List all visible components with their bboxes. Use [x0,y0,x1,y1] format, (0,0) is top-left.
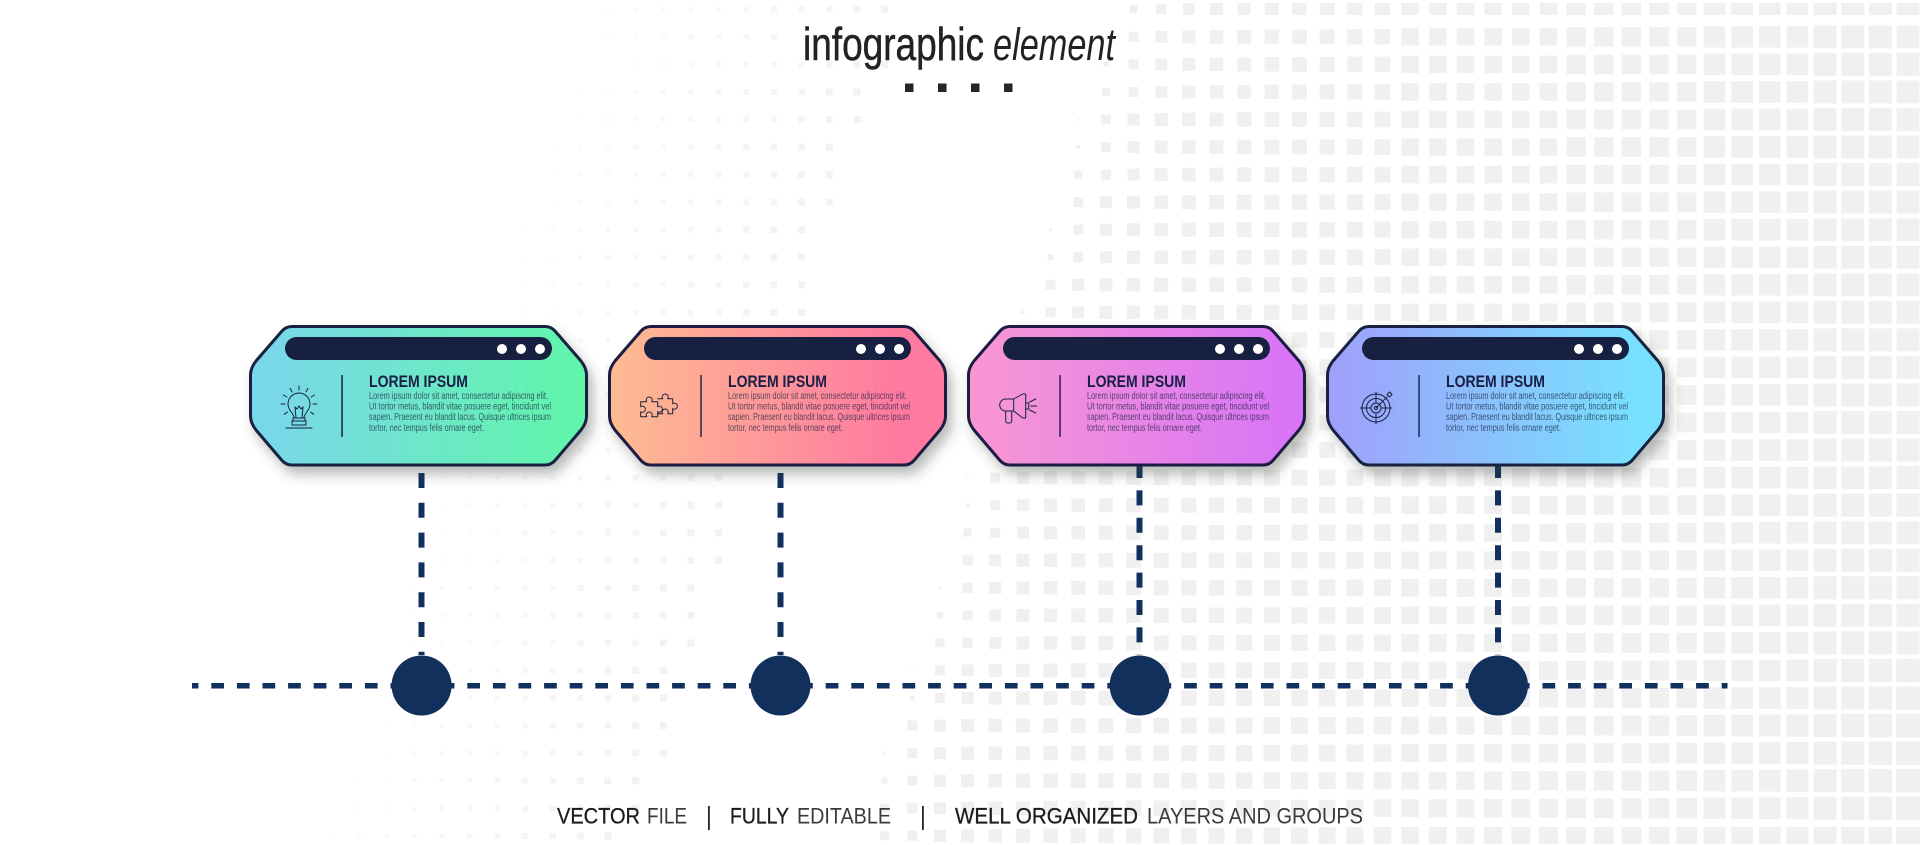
timeline node 1 [392,656,452,716]
icon: puzzle [641,394,677,417]
connector 1 [418,473,424,655]
footer features text: EDITABLE [797,804,891,828]
timeline node 2 [750,656,810,716]
connector 3 [1136,463,1142,655]
body text: sapien. Praesent eu blandit lacus. Quisque ultrices ipsum [369,412,551,423]
body text: tortor, nec tempus felis ornare eget. [369,423,484,434]
body text: tortor, nec tempus felis ornare eget. [728,423,843,434]
panel: card 2: LOREM IPSUM [728,373,827,391]
body text: Ut tortor metus, blandit vitae posuere eget, tincidunt vel [728,402,910,412]
panel: card 3: LOREM IPSUM [1087,373,1186,391]
panel: card 3 [968,326,1304,465]
panel: card 4: LOREM IPSUM [1446,373,1545,391]
body text: Lorem ipsum dolor sit amet, consectetur adipiscing elit. [1087,391,1266,402]
horizontal dashed timeline [192,683,1728,689]
body text: sapien. Praesent eu blandit lacus. Quisque ultrices ipsum [728,412,910,423]
body text: Ut tortor metus, blandit vitae posuere eget, tincidunt vel [369,402,551,412]
timeline node 4 [1468,656,1528,716]
title dots [905,84,1012,92]
body text: sapien. Praesent eu blandit lacus. Quisque ultrices ipsum [1087,412,1269,423]
body text: Lorem ipsum dolor sit amet, consectetur adipiscing elit. [1446,391,1625,402]
body text: tortor, nec tempus felis ornare eget. [1087,423,1202,434]
body text [1087,391,1269,434]
body text [728,391,910,434]
footer features text [557,804,1363,830]
body text [369,391,551,434]
body text: sapien. Praesent eu blandit lacus. Quisque ultrices ipsum [1446,412,1628,423]
connector 4 [1495,463,1501,655]
footer features text: WELL ORGANIZED [955,804,1138,828]
timeline node 3 [1110,656,1170,716]
body text: Lorem ipsum dolor sit amet, consectetur adipiscing elit. [369,391,548,402]
panel: card 4 [1328,326,1664,465]
body text: Lorem ipsum dolor sit amet, consectetur adipiscing elit. [728,391,907,402]
connector 2 [778,473,784,655]
footer features text: FILE [647,804,687,828]
body text: Ut tortor metus, blandit vitae posuere eget, tincidunt vel [1446,402,1628,412]
icon: megaphone [1000,394,1037,423]
title: element [993,19,1117,70]
panel: card 1 [250,326,586,465]
footer features text: FULLY [730,804,789,828]
body text: Ut tortor metus, blandit vitae posuere eget, tincidunt vel [1087,402,1269,412]
icon: light bulb [281,386,317,428]
body text: tortor, nec tempus felis ornare eget. [1446,423,1561,434]
icon: target [1360,392,1392,424]
panel: card 1: LOREM IPSUM [369,373,468,391]
title: infographic [803,18,984,70]
body text [1446,391,1628,434]
footer features text: LAYERS AND GROUPS [1147,804,1363,828]
panel: card 2 [610,326,946,465]
footer features text: VECTOR [557,804,640,828]
